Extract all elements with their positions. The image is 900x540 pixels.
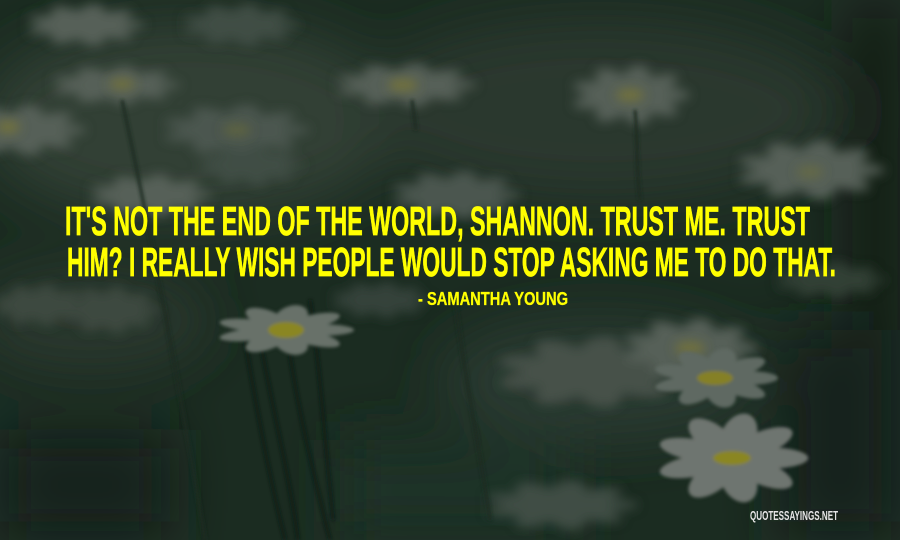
daisy right middle	[651, 347, 778, 409]
flower stems	[122, 100, 640, 540]
daisy mid left	[215, 304, 354, 356]
blurred daisy centres	[0, 79, 823, 354]
daisy lower right	[654, 412, 808, 504]
author attribution: - SAMANTHA YOUNG	[418, 289, 568, 309]
quote text	[65, 198, 836, 285]
watermark: QUOTESSAYINGS.NET	[750, 508, 838, 523]
